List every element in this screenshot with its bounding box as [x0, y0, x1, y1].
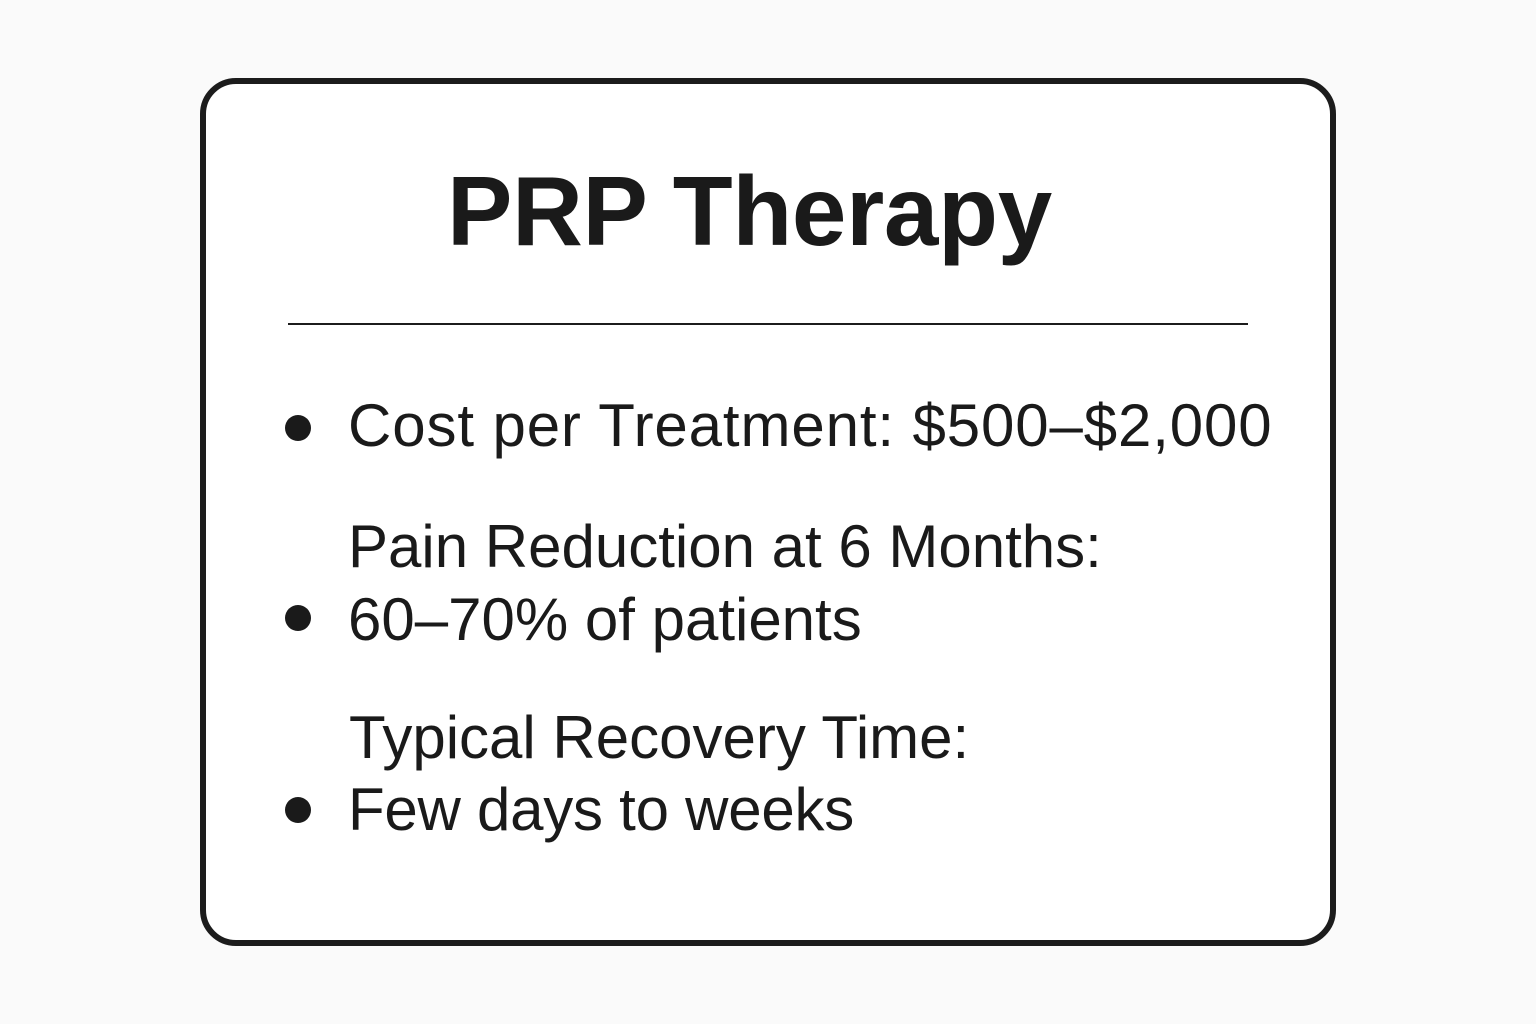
bullet icon: recovery	[285, 797, 311, 823]
text: recovery time	[348, 704, 969, 843]
text: pain reduction: Pain Reduction at 6 Months:	[348, 513, 1102, 580]
text: recovery time: Few days to weeks	[348, 776, 854, 843]
bullet icon: cost	[285, 415, 311, 441]
bullet icon: pain reduction	[285, 605, 311, 631]
text: recovery time: Typical Recovery Time:	[349, 704, 969, 771]
divider line	[288, 323, 1248, 325]
text: pain reduction	[348, 513, 1102, 653]
title: PRP Therapy	[447, 156, 1052, 266]
panel: PRP therapy card	[200, 78, 1336, 946]
text: pain reduction: 60–70% of patients	[348, 586, 862, 653]
text: cost per treatment: Cost per Treatment: $500–$2,000	[348, 392, 1273, 459]
